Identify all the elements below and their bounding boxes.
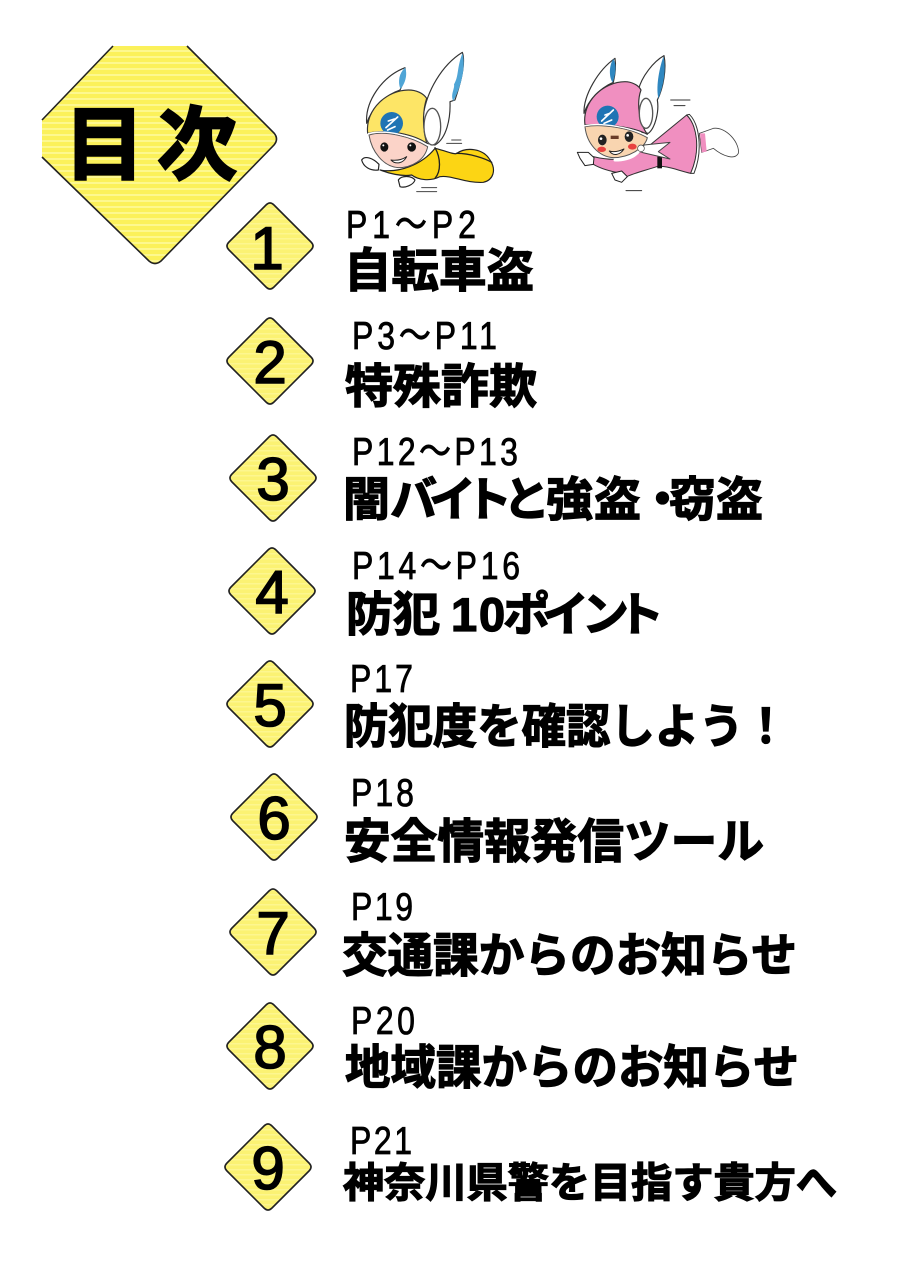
- item 5: 防犯度を確認しよう！: [227, 657, 788, 753]
- diamond badge 4: [229, 548, 315, 634]
- diamond badge 8: [227, 1003, 313, 1089]
- title badge: 目次: [42, 46, 276, 264]
- item 8: 地域課からのお知らせ: [227, 999, 799, 1094]
- page range: P12～P13: [352, 430, 518, 474]
- diamond badge 2: 2: [253, 329, 287, 396]
- diamond badge 3: [230, 435, 316, 521]
- item title: 防犯10ポイント: [346, 588, 664, 641]
- item 3: 闇バイトと強盗・窃盗: [230, 430, 763, 526]
- diamond badge 4: 4: [255, 559, 289, 626]
- diamond badge 6: [231, 774, 317, 860]
- item title: 特殊詐欺: [345, 360, 537, 413]
- item title: 防犯度を確認しよう！: [344, 700, 788, 753]
- page range: P20: [351, 999, 415, 1043]
- item 7: 交通課からのお知らせ: [230, 885, 797, 982]
- page range: P17: [350, 657, 413, 701]
- page range: P14～P16: [352, 544, 520, 588]
- diamond badge 8: 8: [253, 1014, 287, 1081]
- diamond badge 2: [227, 318, 313, 404]
- item 9: 神奈川県警を目指す貴方へ: [225, 1119, 837, 1210]
- item 4: 防犯10ポイント: [229, 544, 664, 641]
- item title: 地域課からのお知らせ: [345, 1041, 799, 1094]
- item title: 神奈川県警を目指す貴方へ: [343, 1160, 837, 1206]
- diamond badge 9: 9: [251, 1135, 285, 1202]
- diamond badge 5: [227, 661, 313, 747]
- diamond badge 7: [230, 889, 316, 975]
- item 1: 自転車盗: [227, 203, 534, 297]
- diamond badge 9: [225, 1124, 311, 1210]
- diamond badge 3: 3: [256, 446, 290, 513]
- diamond badge 7: 7: [256, 900, 290, 967]
- diamond badge 6: 6: [257, 785, 291, 852]
- heading: 目次: 目次: [64, 101, 237, 190]
- diamond badge 1: 1: [250, 215, 284, 282]
- diamond badge 1: [227, 203, 313, 289]
- icon: pink mascot: [577, 56, 738, 191]
- page range: P18: [351, 771, 414, 815]
- page range: P19: [351, 885, 413, 929]
- page range: P3～P11: [352, 314, 497, 358]
- icon: yellow mascot: [362, 52, 493, 192]
- item 6: 安全情報発信ツール: [231, 771, 764, 868]
- item title: 闇バイトと強盗・窃盗: [343, 473, 763, 526]
- item title: 安全情報発信ツール: [344, 815, 764, 868]
- diamond badge 5: 5: [253, 672, 287, 739]
- page range: P1～P2: [346, 203, 476, 247]
- item title: 自転車盗: [344, 244, 534, 297]
- item title: 交通課からのお知らせ: [342, 929, 797, 982]
- page range: P21: [350, 1119, 412, 1163]
- item 2: 特殊詐欺: [227, 314, 537, 413]
